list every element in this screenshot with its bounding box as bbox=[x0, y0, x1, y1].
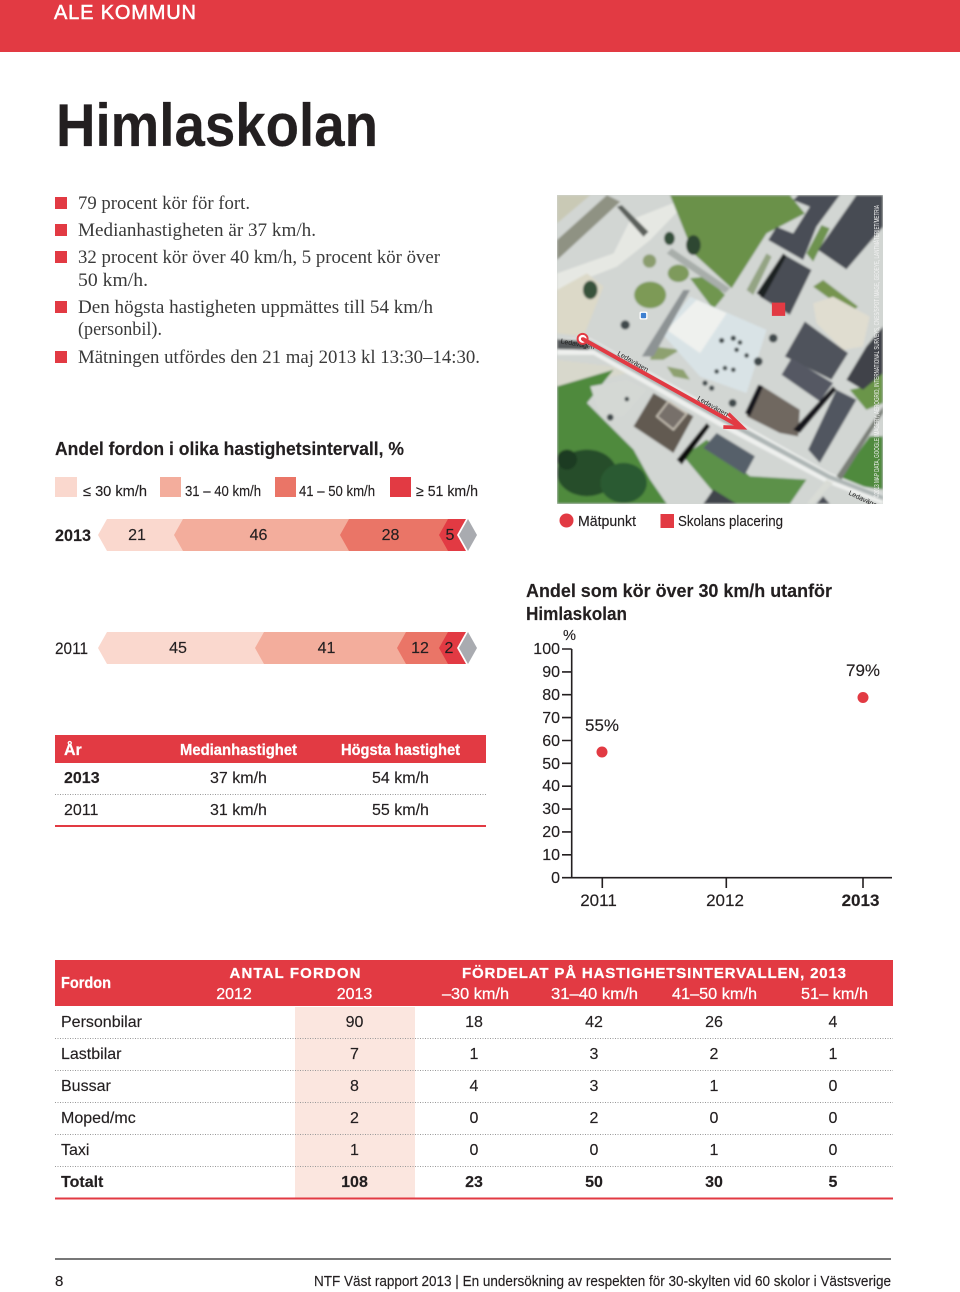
school location marker bbox=[772, 303, 785, 316]
heading: speed interval chart: Andel fordon i olika hastighetsintervall, % bbox=[55, 438, 404, 459]
row: Personbilar: 18 bbox=[465, 1014, 483, 1031]
stacked arrow bar 2011: 45 bbox=[169, 640, 187, 657]
row: Bussar: 4 bbox=[470, 1078, 479, 1095]
map street labels: Ledavägen bbox=[616, 350, 649, 374]
title: Himlaskolan bbox=[56, 92, 378, 159]
header banner bbox=[0, 0, 960, 52]
table: median and top speed: 2013 bbox=[64, 770, 100, 787]
row: Personbilar: Personbilar bbox=[61, 1014, 143, 1031]
line chart: share over 30 km/h: 100 bbox=[533, 641, 560, 658]
line chart: share over 30 km/h: 79% bbox=[846, 661, 880, 680]
row: Taxi: 0 bbox=[590, 1142, 599, 1159]
row: Totalt bbox=[61, 1174, 838, 1191]
row: Lastbilar: 1 bbox=[470, 1046, 479, 1063]
row: Lastbilar: Lastbilar bbox=[61, 1046, 122, 1063]
speed interval legend: ≤ 30 km/h bbox=[83, 484, 147, 500]
stacked arrow bar 2011: 2011 bbox=[55, 640, 88, 658]
line chart: share over 30 km/h: 30 bbox=[542, 801, 560, 818]
footer: NTF Väst rapport 2013 | En undersökning av respekten för 30-skylten vid 60 skolor i Västsverige bbox=[314, 1273, 891, 1290]
table: median and top speed: 37 km/h bbox=[210, 770, 267, 787]
table header: FÖRDELAT PÅ HASTIGHETSINTERVALLEN, 2013 bbox=[462, 965, 846, 982]
row: Personbilar: 26 bbox=[705, 1014, 723, 1031]
row: Personbilar: 90 bbox=[346, 1014, 364, 1031]
heading: share over 30 km/h bbox=[526, 580, 832, 624]
heading: share over 30 km/h: Himlaskolan bbox=[526, 603, 627, 624]
row: Lastbilar: 7 bbox=[350, 1046, 359, 1063]
bullet list: 79 procent kör för fort. bbox=[78, 194, 250, 214]
speed interval legend: 31 – 40 km/h bbox=[185, 484, 261, 500]
table header: 41–50 km/h bbox=[672, 986, 757, 1003]
line chart: share over 30 km/h: 55% bbox=[585, 716, 619, 735]
stacked arrow bar 2011 bbox=[55, 632, 477, 664]
bullet list: Den högsta hastigheten uppmättes till 54 km/h bbox=[78, 298, 433, 318]
row: Moped/mc bbox=[61, 1110, 838, 1127]
line chart: share over 30 km/h: 10 bbox=[542, 847, 560, 864]
table: median and top speed: År bbox=[64, 740, 82, 759]
header banner: ALE KOMMUN bbox=[54, 2, 196, 24]
bullet list: 50 km/h. bbox=[78, 271, 148, 291]
table header: 31–40 km/h bbox=[551, 986, 638, 1003]
table header: Fordon bbox=[61, 975, 111, 992]
row: Bussar: Bussar bbox=[61, 1078, 111, 1095]
row: Moped/mc: 2 bbox=[350, 1110, 359, 1127]
table: median and top speed: 31 km/h bbox=[210, 802, 267, 819]
line chart: share over 30 km/h: 2011 bbox=[580, 891, 617, 910]
stacked arrow bar 2013: 5 bbox=[446, 527, 455, 544]
table: median and top speed: Högsta hastighet bbox=[341, 742, 461, 759]
row: Moped/mc: 2 bbox=[590, 1110, 599, 1127]
row: Bussar: 1 bbox=[710, 1078, 719, 1095]
line chart: share over 30 km/h bbox=[533, 627, 892, 910]
footer: 8 bbox=[55, 1273, 63, 1290]
table header: 2012 bbox=[216, 986, 252, 1003]
map legend: Skolans placering bbox=[678, 513, 783, 530]
highlighted 2013 column bbox=[295, 1007, 415, 1198]
speed direction arrow bbox=[583, 339, 743, 428]
table: median and top speed bbox=[55, 735, 486, 827]
row: Taxi bbox=[61, 1142, 838, 1159]
speed interval legend: 41 – 50 km/h bbox=[299, 484, 375, 500]
row: Totalt: 23 bbox=[465, 1174, 483, 1191]
line chart: share over 30 km/h: 0 bbox=[551, 870, 560, 887]
map street labels: Ledavägen bbox=[847, 490, 882, 511]
row: Bussar: 3 bbox=[590, 1078, 599, 1095]
row: Totalt: 5 bbox=[829, 1174, 838, 1191]
row: Lastbilar: 1 bbox=[829, 1046, 838, 1063]
map street labels: Ledavägen bbox=[560, 338, 595, 351]
row: Lastbilar bbox=[61, 1046, 838, 1063]
row: Taxi: 1 bbox=[350, 1142, 359, 1159]
line chart: share over 30 km/h: % bbox=[563, 627, 576, 644]
table: median and top speed: Medianhastighet bbox=[180, 742, 298, 759]
main road bbox=[557, 338, 883, 505]
stacked arrow bar 2011: 2 bbox=[445, 640, 454, 657]
line chart: share over 30 km/h: 20 bbox=[542, 824, 560, 841]
bullet list: (personbil). bbox=[78, 320, 162, 340]
map street labels bbox=[560, 338, 882, 511]
top left rail and roads bbox=[557, 195, 590, 223]
speed interval legend: ≥ 51 km/h bbox=[416, 484, 478, 500]
heading: share over 30 km/h: Andel som kör över 30 km/h utanför bbox=[526, 580, 832, 601]
buildings bbox=[818, 195, 883, 269]
map legend: Mätpunkt bbox=[578, 513, 637, 530]
cars bbox=[607, 320, 778, 421]
table: median and top speed: 55 km/h bbox=[372, 802, 429, 819]
row: Taxi: Taxi bbox=[61, 1142, 89, 1159]
line chart: share over 30 km/h: 50 bbox=[542, 756, 560, 773]
row: Moped/mc: 0 bbox=[829, 1110, 838, 1127]
stacked arrow bar 2011: 12 bbox=[411, 640, 429, 657]
row: Totalt: 50 bbox=[585, 1174, 603, 1191]
stacked arrow bar 2013 bbox=[55, 519, 477, 551]
row: Bussar bbox=[61, 1078, 838, 1095]
stacked arrow bar 2013: 28 bbox=[382, 527, 400, 544]
line chart: share over 30 km/h: 90 bbox=[542, 664, 560, 681]
row: Personbilar: 42 bbox=[585, 1014, 603, 1031]
row: Taxi: 0 bbox=[829, 1142, 838, 1159]
table header: ANTAL FORDON bbox=[230, 965, 360, 982]
paved areas bbox=[667, 248, 730, 293]
aerial map bbox=[550, 190, 886, 511]
speed interval legend bbox=[55, 477, 478, 500]
table header: 51– km/h bbox=[801, 986, 868, 1003]
footer bbox=[55, 1258, 891, 1290]
row: Totalt: 30 bbox=[705, 1174, 723, 1191]
trees bbox=[583, 281, 598, 299]
table header: –30 km/h bbox=[442, 986, 509, 1003]
stacked arrow bar 2011: 41 bbox=[318, 640, 336, 657]
row: Taxi: 0 bbox=[470, 1142, 479, 1159]
row: Personbilar bbox=[61, 1014, 838, 1031]
row: Moped/mc: Moped/mc bbox=[61, 1110, 136, 1127]
row: Bussar: 0 bbox=[829, 1078, 838, 1095]
row: Totalt: Totalt bbox=[61, 1174, 104, 1191]
bullet list bbox=[55, 194, 480, 368]
row: Moped/mc: 0 bbox=[470, 1110, 479, 1127]
row: Totalt: 108 bbox=[341, 1174, 368, 1191]
bullet list: Mätningen utfördes den 21 maj 2013 kl 13:30–14:30. bbox=[78, 348, 480, 368]
bullet list: 32 procent kör över 40 km/h, 5 procent kör över bbox=[78, 248, 440, 268]
table header: 2013 bbox=[337, 986, 372, 1003]
table header bbox=[55, 960, 893, 1006]
row: Bussar: 8 bbox=[350, 1078, 359, 1095]
stacked arrow bar 2013: 2013 bbox=[55, 527, 91, 545]
row: Personbilar: 4 bbox=[829, 1014, 838, 1031]
line chart: share over 30 km/h: 2012 bbox=[706, 891, 744, 910]
stacked arrow bar 2013: 46 bbox=[250, 527, 268, 544]
line chart: share over 30 km/h: 40 bbox=[542, 778, 560, 795]
line chart: share over 30 km/h: 2013 bbox=[842, 891, 879, 910]
row: Lastbilar: 3 bbox=[590, 1046, 599, 1063]
table: vehicles by type and speed interval bbox=[55, 960, 893, 1200]
green lawns bbox=[670, 195, 805, 288]
measuring point marker bbox=[578, 334, 588, 344]
map legend bbox=[560, 513, 783, 530]
stacked arrow bar 2013: 21 bbox=[128, 527, 146, 544]
bullet list: Medianhastigheten är 37 km/h. bbox=[78, 221, 316, 241]
row: Taxi: 1 bbox=[710, 1142, 719, 1159]
row: Moped/mc: 0 bbox=[710, 1110, 719, 1127]
bus stop icon bbox=[639, 312, 647, 320]
table: median and top speed: 2011 bbox=[64, 802, 99, 819]
table: median and top speed: 54 km/h bbox=[372, 770, 429, 787]
line chart: share over 30 km/h: 80 bbox=[542, 687, 560, 704]
line chart: share over 30 km/h: 70 bbox=[542, 710, 560, 727]
row: Lastbilar: 2 bbox=[710, 1046, 719, 1063]
map street labels: Ledavägen bbox=[696, 395, 729, 419]
line chart: share over 30 km/h: 60 bbox=[542, 733, 560, 750]
